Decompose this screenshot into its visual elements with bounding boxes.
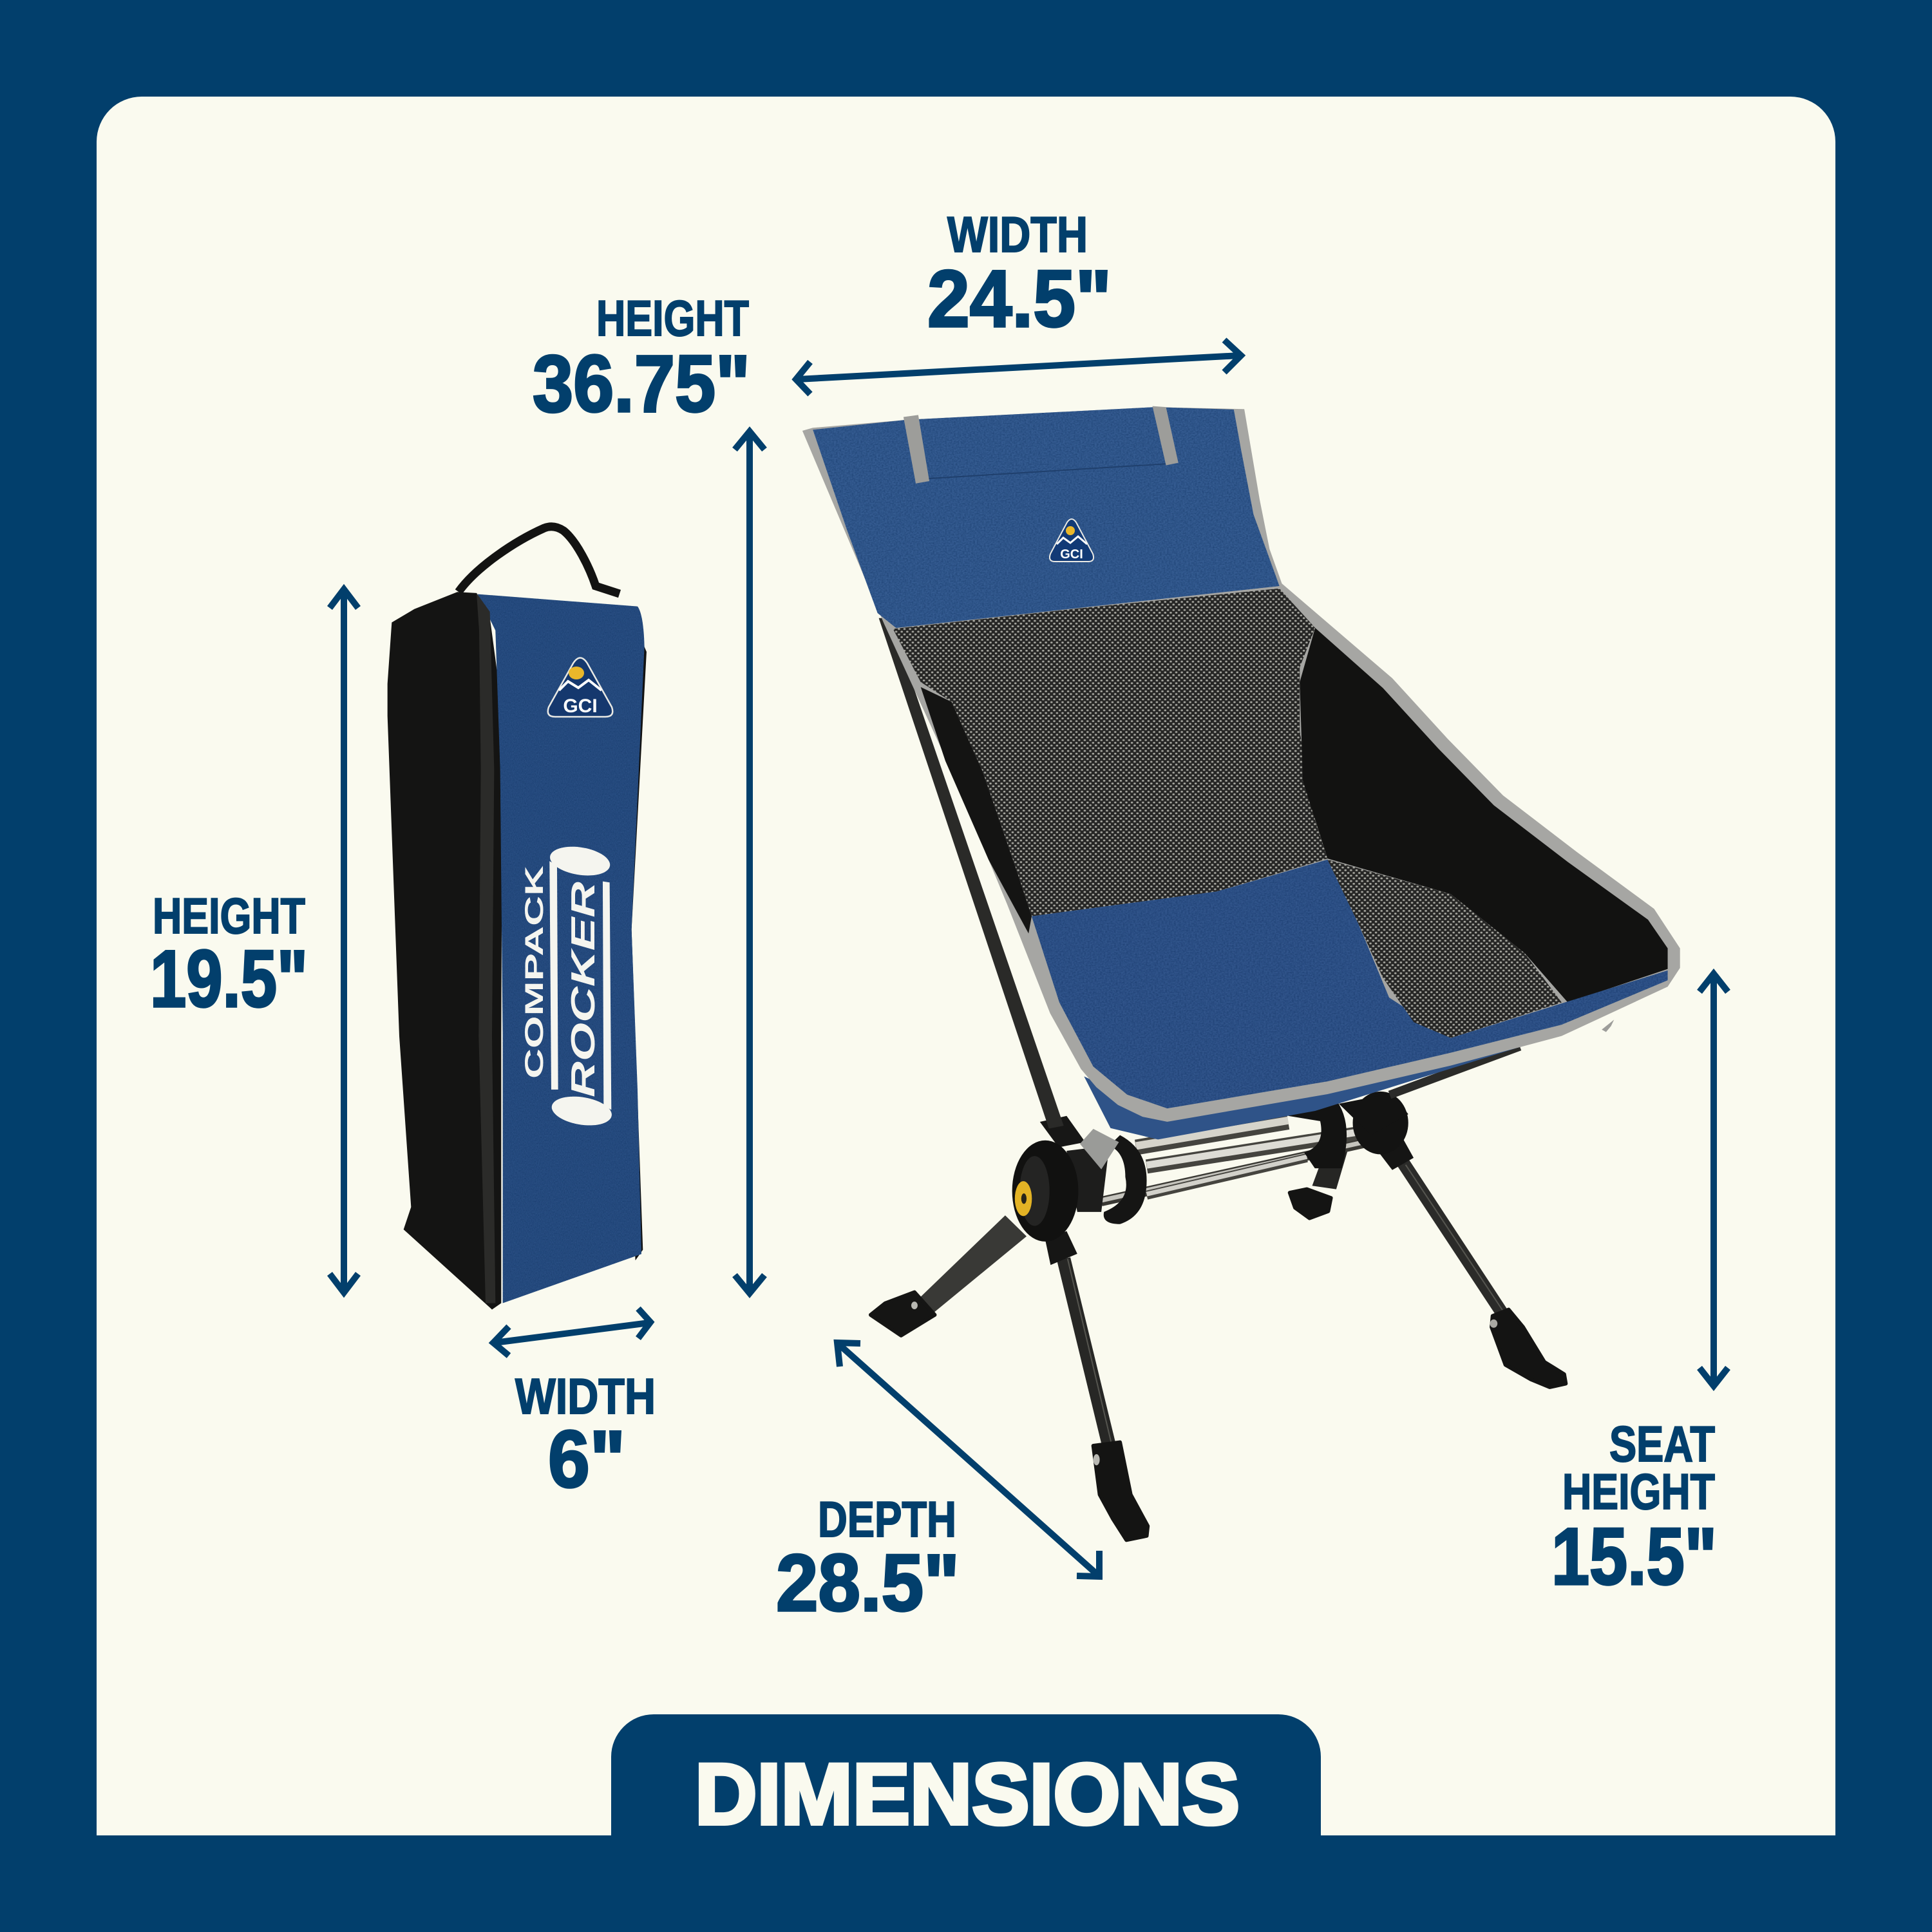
front left leg xyxy=(871,1215,1027,1336)
bag text: compack: COMPACK xyxy=(520,866,549,1079)
chrome cross tubes xyxy=(1101,1121,1365,1202)
bag logo xyxy=(548,658,612,717)
chair fabric seat and back xyxy=(802,406,1680,1139)
rocker logo bottom ellipse xyxy=(551,1093,612,1129)
rear right small leg xyxy=(1290,1135,1352,1218)
chair rear strut xyxy=(1390,1046,1520,1095)
bag logo: GCI xyxy=(563,696,598,717)
label: chair width xyxy=(927,206,1112,344)
label: seat height: HEIGHT xyxy=(1562,1463,1715,1520)
chair logo: GCI xyxy=(1060,547,1083,562)
grey strap xyxy=(1080,1129,1119,1170)
label: bag width: 6" xyxy=(548,1415,625,1504)
chair logo xyxy=(1050,519,1094,562)
bag text: rocker: ROCKER xyxy=(565,881,602,1097)
bag zipper xyxy=(477,593,495,1303)
headrest xyxy=(904,406,1179,484)
bag handle xyxy=(459,527,620,594)
front centre leg xyxy=(1045,1231,1148,1540)
arrow: bag height xyxy=(330,589,358,1293)
rocker logo right bar xyxy=(603,882,611,1110)
rocker logo top ellipse xyxy=(550,843,611,879)
right black side panel xyxy=(1300,628,1668,1003)
title tab xyxy=(611,1714,1321,1842)
label: chair height xyxy=(533,290,750,429)
label: chair depth: 28.5" xyxy=(776,1539,960,1628)
arrow: chair width xyxy=(796,340,1241,394)
small buckle tab xyxy=(1602,1019,1614,1032)
label: bag height xyxy=(150,887,308,1024)
arrow: chair depth xyxy=(837,1343,1099,1577)
bag black side xyxy=(388,592,502,1309)
label: seat height xyxy=(1551,1416,1717,1602)
label: seat height: SEAT xyxy=(1609,1416,1715,1472)
label: seat height: 15.5" xyxy=(1551,1512,1717,1602)
left frame pole xyxy=(879,618,1064,1129)
bag right black edge xyxy=(618,636,647,1260)
bag illustration xyxy=(388,527,647,1309)
chair illustration xyxy=(802,406,1680,1540)
right clamps xyxy=(1288,1092,1408,1168)
label: chair depth xyxy=(776,1491,960,1628)
right leg xyxy=(1379,1139,1566,1387)
label: chair height: 36.75" xyxy=(533,339,750,429)
grey trim outline xyxy=(802,407,1680,1122)
back mesh panel xyxy=(893,589,1327,916)
lower blue skirt xyxy=(1084,1030,1568,1139)
label: bag height: 19.5" xyxy=(150,934,308,1024)
label: chair width: 24.5" xyxy=(927,254,1112,344)
label: chair height: HEIGHT xyxy=(596,290,749,346)
seat mesh panel xyxy=(1327,860,1562,1038)
title: dimensions: DIMENSIONS xyxy=(695,1747,1240,1842)
upper back blue fabric xyxy=(813,407,1280,628)
arrow: bag width xyxy=(493,1309,650,1356)
label: chair depth: DEPTH xyxy=(818,1491,956,1548)
yellow hub cap xyxy=(1015,1181,1032,1216)
label: chair width: WIDTH xyxy=(947,206,1088,263)
chair legs and frame xyxy=(871,1092,1566,1540)
headrest straps xyxy=(904,415,929,484)
blue seat fabric xyxy=(1032,860,1668,1108)
rocker logo left bar xyxy=(549,861,558,1090)
arrow: seat height xyxy=(1700,974,1728,1386)
left black side panel xyxy=(921,687,1032,933)
bag blue front xyxy=(478,594,645,1303)
label: bag width xyxy=(515,1368,656,1504)
label: bag height: HEIGHT xyxy=(153,887,305,944)
label: bag width: WIDTH xyxy=(515,1368,656,1425)
arrow: chair height xyxy=(735,431,764,1293)
main hub xyxy=(1012,1116,1147,1242)
